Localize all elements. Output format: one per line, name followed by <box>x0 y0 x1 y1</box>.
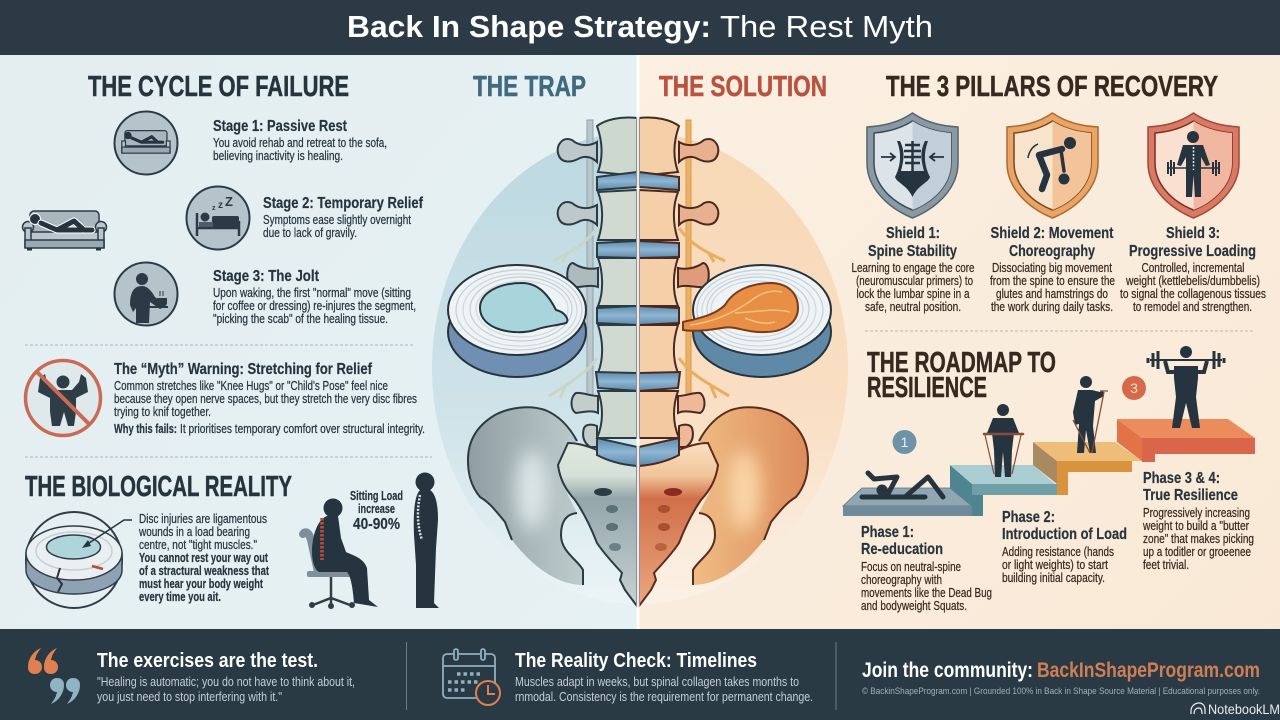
step 3 <box>1033 442 1142 495</box>
quote text: "Healing is automatic; you do not have to think about it, <box>97 675 355 689</box>
quote text: you just need to stop interfering with it." <box>97 690 282 704</box>
background: trap side <box>0 0 638 720</box>
title bar: The Rest Myth <box>720 9 933 44</box>
pelvis: solution half <box>639 407 808 606</box>
icon: person in bed <box>186 186 250 250</box>
heading: roadmap: RESILIENCE <box>867 372 987 404</box>
phase 1 body: and bodyweight Squats. <box>861 599 967 613</box>
myth warning <box>26 360 425 436</box>
transverse process 4 <box>572 393 598 413</box>
lowest disc band left <box>597 438 637 466</box>
reality check text: rnmodal. Consistency is the requirement for permanent change. <box>515 690 813 704</box>
myth body: It prioritises temporary comfort over structural integrity. <box>180 422 425 436</box>
pillar 3 <box>1120 113 1266 314</box>
pillar 2 title: Choreography <box>1009 243 1095 260</box>
icon: standing figure <box>414 472 439 608</box>
disc text block: wounds in a load bearing <box>138 525 250 539</box>
heading: roadmap: THE ROADMAP TO <box>867 347 1056 379</box>
stage 3 body <box>213 286 416 326</box>
sitting load stat: 40-90% <box>353 516 400 533</box>
disc text block: every time you ait. <box>139 590 221 604</box>
reality check text: Muscles adapt in weeks, but spinal collagen takes months to <box>515 675 799 689</box>
icon: injured disc <box>26 512 122 608</box>
transverse process 1 <box>558 139 597 162</box>
vertebra 4 <box>598 325 637 373</box>
step 2 <box>950 465 1057 516</box>
quote text <box>97 650 355 704</box>
phase 3 body: zone" that makes picking <box>1143 532 1254 546</box>
phase 2 body: Adding resistance (hands <box>1002 545 1114 559</box>
figure: band row <box>1073 376 1108 453</box>
figure: overhead barbell <box>1148 346 1224 428</box>
phase 3 title: True Resilience <box>1143 487 1238 504</box>
phase 1 title: Re-education <box>861 541 943 558</box>
icon: sofa with person (large) <box>22 211 106 250</box>
step 4 <box>1117 419 1255 462</box>
badge 3: 3 <box>1130 380 1138 396</box>
stage 2 title: Stage 2: Temporary Relief <box>263 195 424 212</box>
phase 1 body <box>861 560 992 613</box>
icon: person in bed: z <box>212 205 216 212</box>
phase 1 body: movements like the Dead Bug <box>861 586 992 600</box>
big disc: solution (herniated nucleus) <box>683 265 831 377</box>
icon: prohibited muscle figure <box>26 360 100 436</box>
nerve left upper <box>553 228 597 262</box>
phase 2 body: building initial capacity. <box>1002 571 1105 585</box>
nerve left lower <box>549 358 597 398</box>
phase 2 title: Introduction of Load <box>1002 526 1127 543</box>
pillar 1 title: Shield 1: <box>886 225 940 242</box>
disc text block: centre, not "tight muscles." <box>139 538 257 552</box>
sitting load stat: increase <box>358 502 395 516</box>
disc text block: You cannot rest your way out <box>139 551 269 565</box>
stage 1 body <box>213 136 387 163</box>
stage 3 <box>114 262 416 326</box>
badge 1: 1 <box>901 434 909 450</box>
stage 1 title: Stage 1: Passive Rest <box>213 118 348 135</box>
pillar 2 body: the work during daily tasks. <box>991 300 1113 314</box>
pelvis: trap half <box>468 407 637 606</box>
phase 3 and 4 <box>1142 470 1254 572</box>
pillar 1 body: safe, neutral position. <box>865 300 961 314</box>
pillar 2 body: from the spine to ensure the <box>990 274 1115 288</box>
myth body: Common stretches like "Knee Hugs" or "Child's Pose" feel nice <box>114 379 388 393</box>
stage 1 body: believing inactivity is healing. <box>213 149 343 163</box>
phase 3 title: Phase 3 & 4: <box>1143 470 1220 487</box>
stage 2 body: due to lack of gravily. <box>263 226 357 240</box>
spine illustration: solution half <box>639 117 729 447</box>
roadmap staircase <box>843 419 1255 516</box>
pillar 3 body: Controlled, incremental <box>1142 261 1244 275</box>
background: solution side <box>638 0 1280 720</box>
stage 1 <box>114 112 387 174</box>
arrow: to disc nucleus <box>82 520 132 548</box>
pillar 2 title <box>990 225 1114 260</box>
reality check text <box>515 650 813 704</box>
pillar 2 title: Shield 2: Movement <box>990 225 1114 242</box>
pillar 3 title: Shield 3: <box>1166 225 1220 242</box>
pillar 2 body <box>990 261 1115 314</box>
icon: person in bed: Z <box>225 194 233 209</box>
pillar 2 body: glutes and hamstrings do <box>996 287 1108 301</box>
pillar 3 title <box>1129 225 1256 260</box>
stage 2 <box>186 186 424 250</box>
reality check text: The Reality Check: Timelines <box>515 650 757 672</box>
community call to action <box>862 659 1260 697</box>
figure: dead bug <box>862 473 943 497</box>
pillar 2 body: Dissociating big movement <box>992 261 1112 275</box>
icon: shield movement <box>1007 113 1098 218</box>
pillar 1 body: lock the lumbar spine in a <box>856 287 970 301</box>
pillar 2 <box>990 113 1115 314</box>
sitting load stat: Sitting Load <box>350 489 403 503</box>
icon: person in bed: z <box>218 200 223 211</box>
community call to action: Join the community: <box>862 659 1033 682</box>
phase 3 body: weight to build a "butter <box>1142 519 1249 533</box>
vertebra 3 <box>598 258 637 306</box>
icon: sofa in circle <box>114 112 178 174</box>
pillar 1 body: Learning to engage the core <box>852 261 975 275</box>
transverse process 3 <box>567 263 598 287</box>
phase 1 title: Phase 1: <box>861 524 914 541</box>
icon: shield spine stability <box>867 113 958 218</box>
phase 2 title <box>1002 509 1127 543</box>
figure: standing with band <box>984 404 1023 477</box>
central circle: solution half <box>638 132 848 604</box>
pillar 1 title: Spine Stability <box>868 243 957 260</box>
vertebra 5 <box>597 391 637 438</box>
heading: the biological reality: THE BIOLOGICAL REALITY <box>25 471 292 503</box>
badge 1 <box>892 430 916 454</box>
footer <box>0 629 1280 720</box>
myth body: Why this fails: <box>114 422 177 436</box>
quote text: The exercises are the test. <box>97 650 318 672</box>
phase 2 title: Phase 2: <box>1002 509 1055 526</box>
stage 3 body: for coffee or dressing) re-injures the segment, <box>213 299 416 313</box>
icon: calendar with clock <box>443 649 500 705</box>
sitting load stat <box>350 489 403 533</box>
icon: quote marks <box>28 648 80 704</box>
heading: the trap: THE TRAP <box>473 71 586 103</box>
spine illustration: trap half <box>549 117 637 447</box>
pillar 1 title <box>868 225 957 260</box>
phase 3 body: up a toditler or groeenee <box>1143 545 1251 559</box>
disc text block: Disc injuries are ligamentous <box>139 512 267 526</box>
icon: seated figure with chair <box>303 498 378 609</box>
disc text block: of a stractural weakness that <box>139 564 270 578</box>
stage 1 body: You avoid rehab and retreat to the sofa, <box>213 136 387 150</box>
disc text block: must hear your body weight <box>139 577 264 591</box>
myth title: The “Myth” Warning: Stretching for Relief <box>114 361 373 378</box>
myth body <box>114 379 425 436</box>
icon: shield progressive loading <box>1148 113 1239 218</box>
big disc: trap (contained nucleus) <box>448 265 586 377</box>
central circle: trap half <box>432 132 638 604</box>
phase 1 body: Focus on neutral-spine <box>861 560 961 574</box>
phase 2 body <box>1002 545 1114 585</box>
pillar 1 <box>852 113 975 314</box>
icon: person with coffee <box>114 262 178 326</box>
title bar <box>0 0 1280 55</box>
sacrum left <box>558 443 637 606</box>
phase 1 <box>861 524 992 613</box>
heading: the cycle of failure: THE CYCLE OF FAILURE <box>88 71 349 103</box>
pillar 1 body: (neuromuscular primers) to <box>856 274 973 288</box>
stage 3 body: Upon waking, the first "normal" move (sitting <box>213 286 411 300</box>
heading: roadmap <box>867 347 1056 404</box>
pillar 3 body <box>1120 261 1266 314</box>
stage 3 body: "picking the scab" of the healing tissue. <box>213 312 388 326</box>
phase 3 body: feet trivial. <box>1143 558 1189 572</box>
heading: the solution: THE SOLUTION <box>659 71 827 103</box>
step 1 <box>843 488 983 516</box>
phase 2 body: or light weights) to start <box>1002 558 1108 572</box>
phase 3 title <box>1143 470 1238 504</box>
transverse process 5 <box>583 425 597 447</box>
stage 2 body: Symptoms ease slightly overnight <box>263 213 411 227</box>
stage 3 title: Stage 3: The Jolt <box>213 268 320 285</box>
vertebra 1 <box>597 117 637 176</box>
phase 3 body: Progressively increasing <box>1143 506 1250 520</box>
phase 2 <box>1002 509 1127 585</box>
pillar 1 body <box>852 261 975 314</box>
stage 2 body <box>263 213 411 240</box>
vertebra 2 <box>598 190 637 240</box>
disc bands <box>597 172 637 190</box>
pillar 3 body: to remodel and strengthen. <box>1133 300 1252 314</box>
phase 1 title <box>861 524 943 558</box>
phase 1 body: choreography with <box>861 573 942 587</box>
myth body: trying to knif together. <box>114 405 211 419</box>
badge 3 <box>1122 376 1146 400</box>
phase 3 body <box>1142 506 1254 572</box>
disc text block <box>138 512 270 604</box>
myth body: because they open nerve spaces, but they stretch the very disc fibres <box>114 392 417 406</box>
title bar: Back In Shape Strategy: <box>347 9 711 44</box>
centre divider <box>636 55 640 629</box>
transverse process 2 <box>558 202 597 225</box>
